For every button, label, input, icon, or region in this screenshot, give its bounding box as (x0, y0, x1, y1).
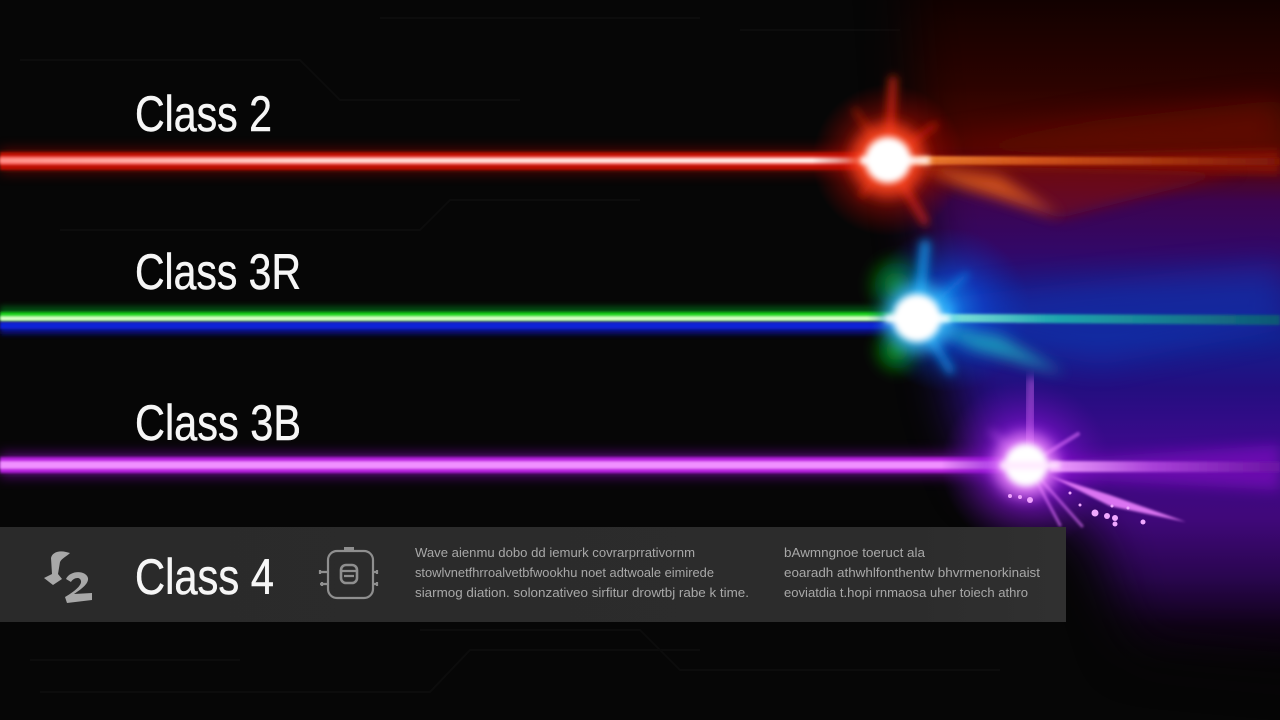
circuit trace background pattern (20, 18, 1000, 692)
icon: swap arrows with number 2 (44, 551, 92, 603)
text block: left description (415, 546, 749, 600)
beam: Class 3B violet (0, 453, 1010, 477)
icon: chip module (320, 547, 377, 598)
text block: right description: bAwmngnoe toeruct ala (784, 546, 925, 560)
text block: right description (784, 546, 1041, 600)
coloured light field (898, 0, 1280, 644)
text block: left description: stowlvnetfhrroalvetbfwookhu noet adtwoale eimirede (415, 566, 714, 580)
sparks (1008, 492, 1146, 526)
heading: Class 4: Class 4 (135, 549, 274, 605)
flare: green and blue (861, 228, 1280, 392)
text block: left description: Wave aienmu dobo dd iemurk covrarprrativornm (415, 546, 695, 560)
text block: right description: eoaradh athwhlfonthentw bhvrmenorkinaist (784, 566, 1041, 580)
heading: Class 3R: Class 3R (135, 244, 301, 300)
heading: Class 2: Class 2 (135, 86, 272, 142)
heading: Class 3B: Class 3B (135, 395, 301, 451)
text block: left description: siarmog diation. solonzativeo sirfitur drowtbj rabe k time. (415, 586, 749, 600)
flare: violet (941, 380, 1280, 550)
panel: Class 4 (0, 527, 1066, 622)
flare: red (812, 80, 1280, 236)
beam: Class 3R green and blue (0, 306, 900, 334)
text block: right description: eoviatdia t.hopi rnmaosa uher toiech athro (784, 586, 1028, 600)
beam: Class 2 red (0, 149, 880, 173)
